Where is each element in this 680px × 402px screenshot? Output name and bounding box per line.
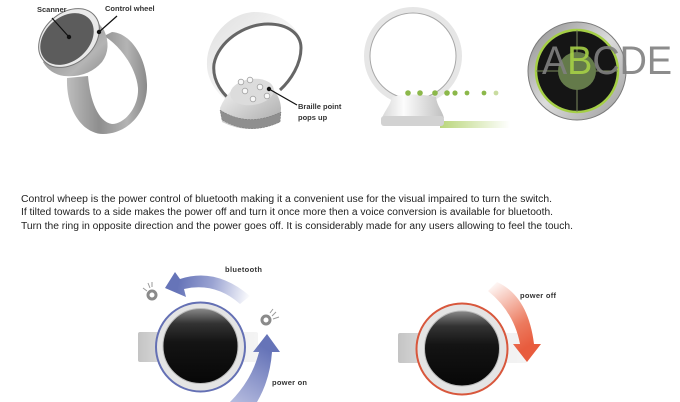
dark inner edge [214, 24, 301, 105]
label: control wheel: Control wheel [105, 4, 155, 13]
arrow: power off [488, 282, 541, 362]
base [382, 94, 444, 118]
icon: left indicator [143, 282, 156, 299]
control wheel body [43, 15, 108, 76]
label: bluetooth: bluetooth [225, 265, 262, 274]
braille top [228, 76, 276, 108]
description text [21, 194, 573, 232]
lens [163, 308, 238, 384]
crosshair [536, 30, 618, 112]
ring with scanner and control wheel [27, 0, 155, 134]
label: braille point pops up [267, 87, 342, 122]
centre lens [558, 52, 596, 90]
domed base [220, 88, 281, 129]
arrow: power on [230, 334, 280, 402]
ring band [67, 32, 147, 134]
strap [398, 333, 527, 363]
strap [138, 332, 258, 362]
label: power on: power on [272, 378, 307, 387]
red dial: power off [398, 282, 556, 394]
metal bezel [528, 22, 626, 120]
ring with braille points [207, 12, 342, 129]
description text: Control wheep is the power control of bluetooth making it a convenient use for the visual impaired to turn the switch. [21, 194, 552, 205]
label: power off: power off [520, 291, 556, 300]
wheel rim [27, 0, 111, 79]
lens [424, 311, 500, 386]
green dots [405, 90, 498, 96]
ring loop [207, 12, 301, 105]
label: braille point pops up: pops up [298, 113, 328, 122]
letters ABCDE: ABCDE [542, 39, 672, 83]
green light strip [440, 121, 510, 128]
wheel [381, 116, 444, 126]
icon: right indicator [262, 309, 279, 324]
knurled wheel [220, 110, 281, 129]
label: scanner: Scanner [37, 5, 67, 14]
blue dial: bluetooth and power on [138, 265, 307, 402]
ring emitting green dots [367, 10, 510, 128]
braille points [238, 77, 270, 102]
arrow: bluetooth [165, 272, 250, 304]
dial with letter reader [528, 22, 672, 120]
dial [416, 304, 508, 394]
black face with green ring [536, 30, 618, 112]
description text: Turn the ring in opposite direction and the power goes off. It is considerably made for any users allowing to feel the touch. [21, 221, 573, 232]
label: braille point pops up: Braille point [298, 102, 342, 111]
dial [156, 302, 245, 392]
scanner face [30, 3, 104, 75]
description text: If tilted towards to a side makes the power off and turn it once more then a voice conversion is available for bluetooth. [21, 207, 553, 218]
white ring [367, 10, 459, 102]
